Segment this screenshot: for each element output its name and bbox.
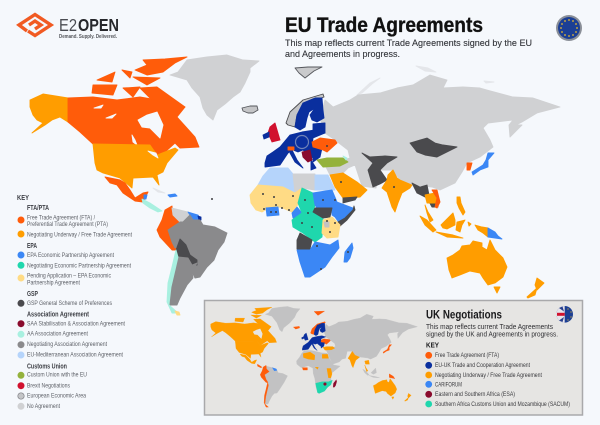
- panel key rows: Eastern and Southern Africa (ESA): [435, 392, 515, 398]
- Tasmania: [494, 287, 500, 293]
- subtitle: [285, 38, 532, 60]
- inset world map: [211, 306, 417, 407]
- Great Lakes: [148, 151, 158, 158]
- West Africa pending: [250, 185, 302, 212]
- Hudson Bay: [138, 112, 163, 138]
- Papua New Guinea: [488, 228, 502, 239]
- panel: UK negotiations: [204, 300, 582, 415]
- panel heading: UK Negotiations: [426, 309, 502, 321]
- Argentina: [169, 257, 197, 305]
- Thailand: [425, 193, 437, 203]
- Southern Africa: [297, 240, 339, 277]
- panel description: signed by the UK and Agreements in progress.: [426, 331, 558, 338]
- group: GSP: GSP: [27, 291, 38, 298]
- Alaska: [30, 94, 68, 133]
- Ukraine: [312, 138, 337, 152]
- icon: UK and EU flag badge: [556, 306, 573, 323]
- Indonesia and Malaysia: [420, 197, 488, 238]
- Colombia, Ecuador, Peru: [157, 206, 180, 250]
- group: FTA/PTA: [18, 205, 132, 238]
- Australia: [447, 240, 507, 285]
- tagline: Demand. Supply. Delivered.: [59, 34, 118, 40]
- Caribbean: [144, 188, 177, 199]
- South Sudan: [313, 208, 332, 218]
- Brazil: [168, 215, 227, 278]
- Japan: [472, 153, 494, 175]
- Arctic Russia islands: [357, 66, 494, 95]
- group: Customs Union: No Agreement: [27, 404, 60, 410]
- group: Customs Union: Custom Union with the EU: [27, 373, 87, 379]
- Yemen: [343, 197, 357, 203]
- group: Association Agreement: SAA Stabilisation & Association Agreement: [27, 321, 125, 327]
- Ghana, Ivory Coast: [266, 207, 279, 216]
- Tierra del Fuego: [175, 311, 180, 315]
- Cameroon: [292, 207, 302, 220]
- group: Association Agreement: Association Agreement: [27, 311, 90, 318]
- Chile: [167, 250, 178, 313]
- panel key rows: Southern Africa Customs Union and Mozambique (SACUM): [435, 402, 570, 408]
- India: [382, 170, 412, 212]
- group: GSP: [18, 291, 112, 307]
- subtitle: This map reflects current Trade Agreements signed by the EU: [285, 38, 532, 49]
- group: EPA: Negotiating Economic Partnership Agreement: [27, 263, 131, 269]
- group: EPA: Pending Application – EPA Economic: [27, 274, 111, 280]
- title: EU Trade Agreements: [285, 13, 483, 37]
- group: Association Agreement: Negotiating Association Agreement: [27, 342, 107, 348]
- Italy: [290, 150, 303, 168]
- group: FTA/PTA: Free Trade Agreement (FTA) /: [27, 216, 95, 222]
- panel description: [426, 324, 558, 338]
- Svalbard: [295, 67, 322, 78]
- Asia and Russia: [320, 75, 560, 190]
- Canada: [68, 57, 199, 155]
- icon: EU flag badge: [556, 15, 582, 41]
- logo: E2open: [19, 14, 119, 40]
- Sudan: [313, 190, 337, 208]
- North Africa: Mediterranean agreements: [258, 168, 295, 193]
- Madagascar: [344, 243, 353, 262]
- group: Association Agreement: EU-Mediterranean Association Agreement: [27, 353, 123, 359]
- UK: [268, 123, 280, 142]
- Norway: [286, 94, 324, 127]
- world map: EU trade agreements: [30, 55, 560, 315]
- Caucasus: [343, 156, 347, 160]
- Guyana, Suriname: [188, 212, 200, 220]
- Paraguay: [187, 255, 197, 265]
- group: EPA: [18, 243, 131, 286]
- group: Customs Union: [18, 363, 87, 410]
- group: GSP: GSP General Scheme of Preferences: [27, 301, 112, 307]
- group: EPA: Partnership Agreement: [27, 280, 80, 286]
- group: Customs Union: Brexit Negotiations: [27, 383, 70, 389]
- group: Association Agreement: [18, 311, 125, 359]
- Korea: [467, 163, 472, 170]
- panel key rows: Free Trade Agreement (FTA): [435, 353, 499, 359]
- East Africa: [322, 217, 340, 238]
- group: Customs Union: European Economic Area: [27, 394, 87, 400]
- icon: orange diamond mark: [19, 14, 51, 36]
- Ethiopia: [332, 202, 354, 224]
- panel key heading: KEY: [426, 341, 439, 350]
- EU continental: [265, 130, 325, 167]
- Central Asia dark group: [362, 153, 397, 187]
- Central Africa: [292, 188, 323, 242]
- Baltic states: [313, 123, 325, 135]
- Uganda: [324, 222, 329, 227]
- panel key rows: EU-UK Trade and Cooperation Agreement: [435, 363, 530, 369]
- GSP country dots: [211, 145, 395, 270]
- panel description: This map reflects current Trade Agreements: [426, 324, 553, 331]
- group: EPA: EPA Economic Partnership Agreement: [27, 253, 114, 259]
- group: FTA/PTA: Preferential Trade Agreement (PTA): [27, 222, 108, 228]
- Arabian peninsula: [330, 173, 367, 198]
- Ireland: [263, 132, 269, 139]
- New Zealand: [527, 278, 544, 298]
- Canadian lakes: [94, 105, 137, 145]
- key: EU agreements: [17, 195, 132, 410]
- group: Customs Union: Customs Union: [27, 363, 67, 370]
- group: EPA: EPA: [27, 243, 37, 250]
- Bolivia: [176, 239, 190, 258]
- Myanmar, Cambodia: [412, 183, 438, 207]
- panel key rows: [425, 352, 570, 408]
- Angola: [297, 233, 312, 249]
- Somalia: [338, 206, 355, 226]
- Greenland: [170, 55, 259, 120]
- group: FTA/PTA: Negotiating Underway / Free Trade Agreement: [27, 232, 132, 238]
- wordmark: OPEN: [78, 15, 119, 35]
- group: FTA/PTA: FTA/PTA: [27, 205, 49, 212]
- Iceland: [242, 106, 258, 113]
- EU stars ring: [296, 136, 308, 148]
- Central America: [142, 199, 162, 212]
- Libya: [293, 174, 315, 193]
- panel key rows: Negotiating Underway / Free Trade Agreement: [435, 373, 542, 379]
- Western Balkans: [302, 150, 312, 162]
- panel key rows: CARIFORUM: [435, 382, 462, 388]
- Greece: [311, 160, 316, 170]
- subtitle: and Agreements in progress.: [285, 49, 400, 60]
- Turkey: [317, 158, 348, 167]
- wordmark: E2: [59, 15, 77, 35]
- group: Association Agreement: AA Association Agreement: [27, 332, 88, 338]
- Vietnam: [432, 190, 440, 208]
- Mexico: [105, 177, 148, 202]
- French Guiana: [198, 216, 201, 220]
- Switzerland: [288, 147, 294, 150]
- panel background: [204, 300, 582, 415]
- wordmark: [59, 15, 119, 35]
- Sweden and Finland: [295, 98, 324, 130]
- Venezuela: [172, 208, 190, 222]
- key heading: KEY: [17, 195, 29, 202]
- USA: [93, 144, 178, 188]
- Mongolia: [410, 138, 457, 157]
- Egypt: [315, 175, 335, 190]
